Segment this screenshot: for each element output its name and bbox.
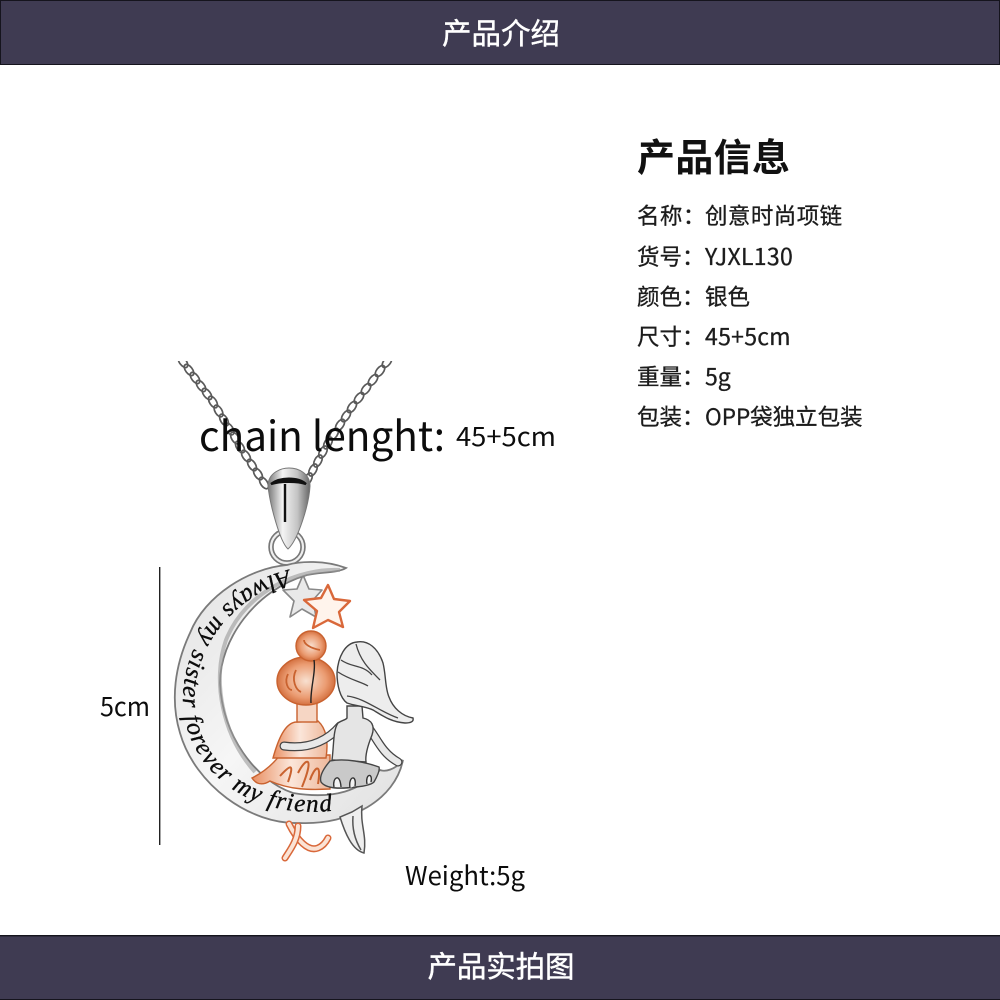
rose girl torso xyxy=(273,721,327,758)
rose girl top knot xyxy=(296,631,326,661)
chain length label xyxy=(199,403,556,463)
necklace chain xyxy=(176,355,394,490)
spec: size: 尺寸： xyxy=(637,320,705,352)
moon inscription: Always my sister forever my friend xyxy=(179,569,332,812)
weight label: Weight:5g xyxy=(405,856,525,893)
rose girl head xyxy=(277,657,335,705)
spec: colour: 颜色： xyxy=(637,280,705,312)
spec: size: 45+5cm xyxy=(705,318,791,352)
moon crescent with inscription xyxy=(174,561,404,824)
pendant height label: 5cm xyxy=(100,687,150,724)
footer bar xyxy=(0,935,1000,1000)
rose girl skirt xyxy=(252,755,330,789)
jump ring xyxy=(271,531,303,563)
spec: packaging: OPP袋独立包装 xyxy=(705,400,863,432)
spec: name: 创意时尚项链 xyxy=(705,199,842,231)
rose gold girl xyxy=(252,631,335,789)
pendant bail xyxy=(268,468,310,549)
spec: weight: 重量： xyxy=(637,360,705,392)
product info heading: 产品信息 xyxy=(637,127,790,182)
footer title: 产品实拍图 xyxy=(428,944,574,986)
chain length label: chain lenght: xyxy=(199,403,445,463)
silver legs xyxy=(340,806,365,853)
spec: weight: 5g xyxy=(705,358,731,392)
header title: 产品介绍 xyxy=(442,11,560,53)
chain length value: 45+5cm xyxy=(456,417,556,454)
silver girl torso xyxy=(332,706,373,762)
spec: item number: 货号： xyxy=(637,240,705,272)
spec: packaging: 包装： xyxy=(637,400,705,432)
silver star xyxy=(283,575,322,617)
silver girl hugging arm xyxy=(284,726,340,747)
spec: item number: YJXL130 xyxy=(704,238,793,272)
silver girl xyxy=(284,642,413,788)
silver girl skirt xyxy=(321,760,379,788)
spec: colour: 银色 xyxy=(705,280,750,312)
header bar xyxy=(0,0,1000,64)
rose gold legs xyxy=(285,824,328,858)
rose girl neck xyxy=(297,703,317,722)
spec: name: 名称： xyxy=(637,199,705,231)
product info panel xyxy=(637,127,863,432)
silver girl right arm xyxy=(366,725,398,762)
rose gold star xyxy=(304,585,350,628)
silver girl hair xyxy=(337,642,413,723)
